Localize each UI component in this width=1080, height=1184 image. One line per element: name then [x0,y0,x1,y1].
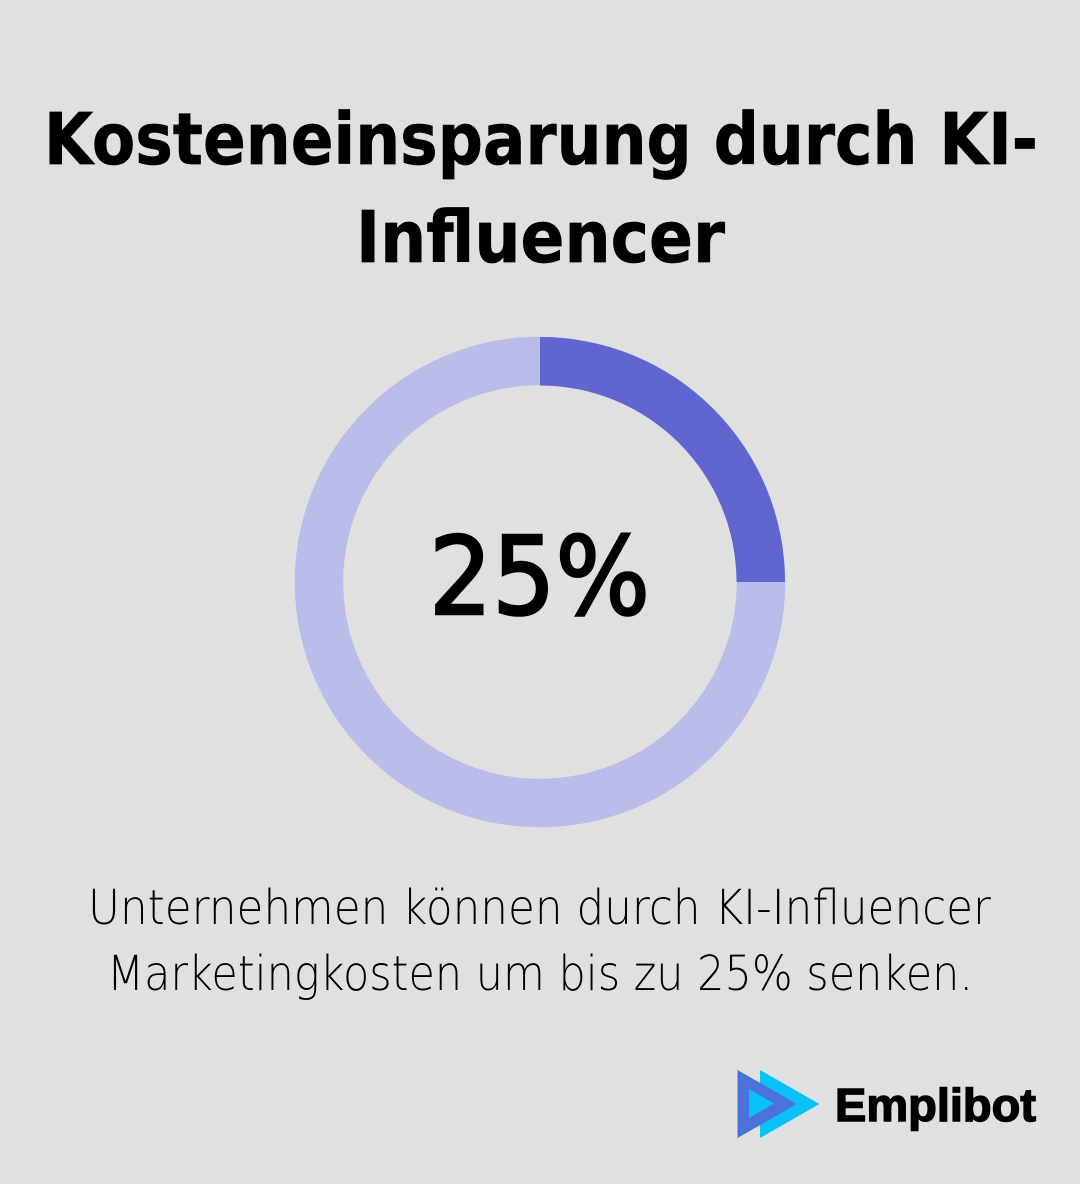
center value: 25% [429,515,650,640]
icon: play triangles [738,1070,820,1138]
description text: Unternehmen können durch KI-Influencer [88,880,991,936]
title: Influencer [356,196,725,279]
title [44,98,1038,279]
description text: Marketingkosten um bis zu 25% senken. [107,946,973,1002]
description text [88,880,991,1002]
wordmark: Emplibot [835,1079,1036,1131]
donut segment: 25% [540,337,785,582]
donut chart [319,337,785,803]
logo: Emplibot [738,1070,1036,1138]
